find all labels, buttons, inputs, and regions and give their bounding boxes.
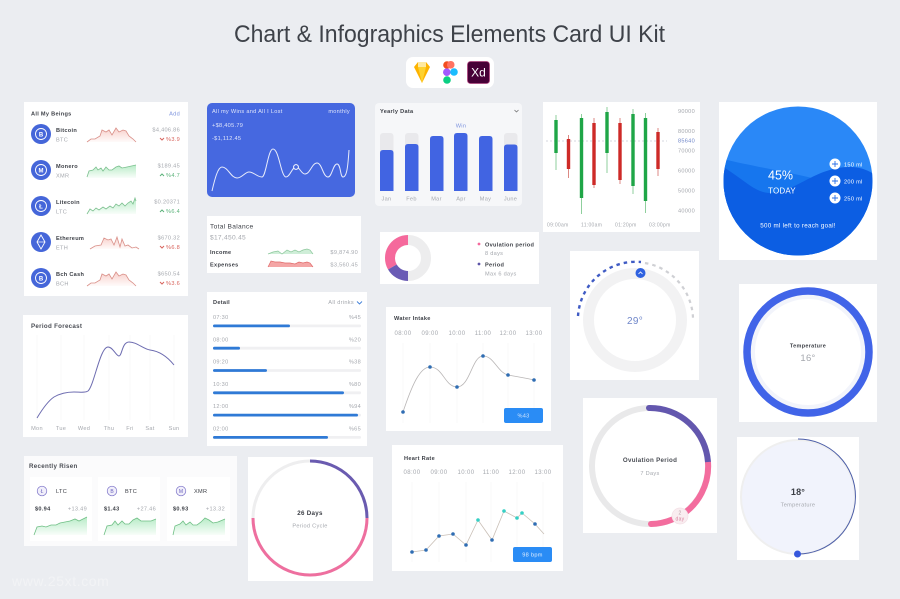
- day labels: Sun: [169, 426, 179, 432]
- add water buttons: [830, 158, 863, 204]
- line chart: forecast: [37, 342, 174, 418]
- progress rows: %45: [349, 315, 361, 321]
- row: ethereum: [31, 232, 180, 252]
- row: litecoin: $0.20371: [154, 200, 180, 206]
- value: temperature: 18°: [791, 487, 805, 497]
- value: balance: $17,450.45: [210, 234, 246, 242]
- label: temperature: Temperature: [790, 344, 826, 350]
- row: bch cash: Bch Cash: [56, 272, 84, 278]
- heading: water intake: Water Intake: [394, 316, 431, 322]
- panel: dial temperature: [570, 251, 699, 380]
- icon: filter chevron: [357, 302, 362, 304]
- row: bitcoin: Bitcoin: [56, 128, 77, 134]
- panel: temperature ring: [739, 284, 877, 422]
- panel: yearly data: [375, 103, 522, 206]
- legend: Period: [485, 262, 504, 268]
- row: monero: [31, 160, 180, 180]
- sub-card: ltc: [30, 477, 92, 541]
- price axis: 40000: [678, 208, 695, 214]
- ring chart: [253, 461, 367, 575]
- row: bitcoin: $4,406.86: [152, 128, 180, 134]
- progress rows: 02:00: [213, 426, 228, 432]
- row: ethereum: %6.8: [166, 245, 180, 251]
- row: expenses: [210, 261, 358, 268]
- row: bch cash: $650.54: [158, 272, 180, 278]
- row: litecoin: [31, 196, 180, 216]
- heading: ovulation period: Ovulation Period: [623, 457, 677, 464]
- icon: sketch: [414, 62, 430, 83]
- icon: figma: [443, 61, 458, 84]
- row: ethereum: $670.32: [158, 236, 180, 242]
- progress rows: %20: [349, 337, 361, 343]
- time labels: 10:00: [457, 470, 475, 476]
- time labels: 11:00: [475, 331, 492, 337]
- price axis: 90000: [678, 109, 695, 115]
- water circle: [720, 105, 876, 260]
- label: monthly: monthly: [328, 109, 350, 115]
- progress rows: %65: [349, 426, 361, 432]
- gauge ring: [588, 274, 682, 366]
- row: bitcoin: %3.9: [166, 137, 180, 143]
- row: bch cash: [31, 268, 180, 288]
- day labels: Wed: [78, 426, 90, 432]
- bar labels: May: [480, 196, 491, 202]
- heading: total balance: Total Balance: [210, 224, 254, 230]
- value: percent: 45%: [768, 168, 793, 182]
- day labels: Mon: [31, 426, 43, 432]
- row: ethereum: ETH: [56, 246, 68, 252]
- time axis: [547, 222, 671, 228]
- inner ring: [752, 296, 864, 408]
- panel: water goal: [719, 102, 877, 260]
- price marker line: [546, 140, 667, 142]
- time axis: 09:00am: [547, 222, 569, 228]
- line chart: water: [403, 356, 534, 412]
- sub-card: xmr: [167, 477, 230, 541]
- sub-card: btc: +27.46: [137, 506, 156, 512]
- row: litecoin: %6.4: [166, 209, 180, 215]
- link: add: Add: [169, 112, 180, 118]
- sub-card: xmr: +13.32: [206, 506, 225, 512]
- button: percent: %43: [517, 414, 530, 420]
- outer ring: [747, 291, 869, 413]
- bar labels: Apr: [456, 196, 466, 202]
- dashed scale: remaining: [645, 263, 693, 318]
- panel: all my beings: [24, 102, 188, 296]
- bar labels: Mar: [431, 196, 442, 202]
- filter: all drinks: All drinks: [328, 300, 354, 306]
- heading: period forecast: Period Forecast: [31, 323, 82, 330]
- label: temperature: Temperature: [781, 502, 815, 508]
- row: bitcoin: BTC: [56, 138, 68, 144]
- label: win: Win: [456, 124, 466, 130]
- icon: chevron: [514, 110, 518, 112]
- button: percent: [504, 408, 543, 423]
- row: monero: XMR: [56, 174, 69, 180]
- time labels: 12:00: [508, 470, 526, 476]
- sub-card: ltc: LTC: [56, 489, 67, 495]
- add water buttons: 150 ml: [844, 162, 863, 168]
- panel: detail: [207, 292, 367, 446]
- price axis: 70000: [678, 148, 695, 154]
- row: litecoin: Litecoin: [56, 200, 80, 206]
- panel: heart rate: [392, 445, 563, 571]
- progress rows: %94: [349, 404, 361, 410]
- progress rows: %80: [349, 382, 361, 388]
- progress rows: %38: [349, 360, 361, 366]
- sub-card: ltc: $0.94: [35, 506, 51, 512]
- time axis: 03:00pm: [649, 222, 671, 228]
- label: period cycle: Period Cycle: [292, 524, 328, 530]
- panel: total balance: [207, 216, 361, 273]
- row: bch cash: B: [39, 276, 44, 282]
- price axis: 50000: [678, 188, 695, 194]
- time labels: [394, 331, 543, 337]
- label: today: TODAY: [768, 186, 796, 196]
- row: litecoin: Ł: [39, 204, 43, 210]
- row: expenses: $3,560.45: [330, 262, 358, 268]
- row: bch cash: %3.6: [166, 281, 180, 287]
- progress rows: 08:00: [213, 337, 228, 343]
- row: income: Income: [210, 250, 231, 256]
- legend: [478, 242, 535, 278]
- bar chart: [380, 133, 518, 191]
- heading: yearly data: Yearly Data: [380, 109, 414, 115]
- day labels: Tue: [56, 426, 66, 432]
- day marker: [672, 508, 688, 524]
- panel: water intake: [386, 307, 551, 431]
- row: ethereum: Ethereum: [56, 236, 84, 242]
- panel: ovulation donut: [380, 232, 539, 284]
- row: bitcoin: B: [39, 132, 44, 138]
- time labels: 09:00: [430, 470, 448, 476]
- red candles: [567, 118, 660, 188]
- heading: wins: All my Wins and All I Lost: [212, 109, 283, 115]
- legend: 8 days: [485, 251, 503, 257]
- watermark: www.25xt.com: [11, 573, 109, 589]
- sub-card: btc: [98, 477, 160, 541]
- button: bpm: 98 bpm: [522, 552, 543, 558]
- progress arc: [798, 439, 855, 554]
- time labels: [403, 470, 552, 476]
- day labels: [31, 426, 179, 432]
- legend: Ovulation period: [485, 242, 535, 248]
- day marker: day: [676, 516, 685, 522]
- progress rows: 10:30: [213, 382, 228, 388]
- price axis: [678, 109, 695, 214]
- row: bch cash: BCH: [56, 282, 69, 288]
- label: days: 7 Days: [640, 471, 660, 477]
- sub-card: ltc: +13.49: [68, 506, 87, 512]
- day labels: Sat: [145, 426, 155, 432]
- bar labels: [382, 196, 517, 202]
- dial handle: [636, 268, 646, 278]
- ring chart: [592, 408, 708, 524]
- price axis: 60000: [678, 168, 695, 174]
- panel: recently risen: [24, 456, 237, 546]
- value: loss: -$1,112.45: [212, 136, 241, 142]
- row: bitcoin: [31, 124, 180, 144]
- row: income: $9,874.90: [330, 250, 358, 256]
- line chart: heart rate: [412, 511, 544, 552]
- button: bpm: [513, 547, 552, 562]
- progress rows: [213, 315, 361, 439]
- time labels: 13:00: [525, 331, 543, 337]
- sub-card: xmr: XMR: [194, 489, 207, 495]
- row: litecoin: LTC: [56, 210, 67, 216]
- dial handle: [794, 550, 801, 558]
- data points: [401, 354, 536, 414]
- sub-card: btc: BTC: [125, 489, 137, 495]
- time labels: 08:00: [394, 331, 412, 337]
- row: monero: %4.7: [166, 173, 180, 179]
- heading: heart rate: Heart Rate: [404, 456, 435, 462]
- time labels: 13:00: [534, 470, 552, 476]
- dashed scale: active: [578, 262, 641, 316]
- time labels: 09:00: [421, 331, 439, 337]
- goal text: 500 ml left to reach goal!: [760, 222, 836, 230]
- panel: wins and losses: [207, 103, 355, 197]
- price axis: 80000: [678, 129, 695, 135]
- add water buttons: 250 ml: [844, 196, 863, 202]
- sub-card: xmr: M: [179, 489, 183, 495]
- data points: [410, 509, 537, 554]
- time labels: 12:00: [499, 331, 517, 337]
- panel: period cycle: [248, 457, 373, 581]
- heading: detail: Detail: [213, 300, 230, 306]
- day labels: Fri: [126, 426, 134, 432]
- bar labels: Feb: [406, 196, 417, 202]
- value: days: 26 Days: [297, 510, 323, 517]
- time labels: 08:00: [403, 470, 421, 476]
- add water buttons: 200 ml: [844, 180, 863, 186]
- heading: recently risen: Recently Risen: [29, 463, 78, 470]
- progress rows: 07:30: [213, 315, 228, 321]
- bar labels: Jan: [382, 196, 391, 202]
- panel: ovulation period: [583, 398, 717, 533]
- time axis: 11:00am: [581, 222, 602, 228]
- dial disc: [741, 440, 855, 554]
- panel: period forecast: [23, 315, 188, 437]
- sub-card: btc: $1.43: [104, 506, 120, 512]
- row: monero: Monero: [56, 164, 78, 170]
- day marker: 2: [678, 510, 682, 516]
- heading: all my beings: All My Beings: [31, 112, 72, 118]
- line chart: wins: [212, 149, 349, 191]
- time axis: 01:20pm: [615, 222, 637, 228]
- panel: candlestick chart: [543, 102, 700, 232]
- value: gain: +$8,405.79: [212, 123, 243, 129]
- title: Chart & Infographics Elements Card UI Kit: [234, 21, 665, 48]
- progress rows: 12:00: [213, 404, 228, 410]
- tool icons panel: [406, 57, 494, 88]
- sub-card: btc: B: [110, 489, 114, 495]
- row: expenses: Expenses: [210, 262, 239, 268]
- row: income: [210, 249, 358, 256]
- value: temperature: 29°: [627, 316, 643, 327]
- donut chart: [390, 240, 426, 276]
- price axis: 85640: [678, 138, 695, 144]
- progress rows: 09:20: [213, 360, 228, 366]
- legend: Max 6 days: [485, 272, 517, 278]
- value: temperature: 16°: [800, 353, 816, 364]
- green candles: [554, 107, 647, 214]
- row: monero: M: [38, 168, 44, 174]
- panel: temperature dial: [737, 437, 859, 560]
- sub-card: ltc: Ł: [41, 489, 44, 495]
- row: monero: $189.45: [158, 164, 180, 170]
- bar labels: June: [504, 196, 517, 202]
- day labels: Thu: [104, 426, 114, 432]
- chart marker: [294, 165, 298, 169]
- sub-card: xmr: $0.93: [173, 506, 188, 512]
- time labels: 11:00: [483, 470, 500, 476]
- icon: xd: Xd: [471, 66, 486, 80]
- time labels: 10:00: [448, 331, 466, 337]
